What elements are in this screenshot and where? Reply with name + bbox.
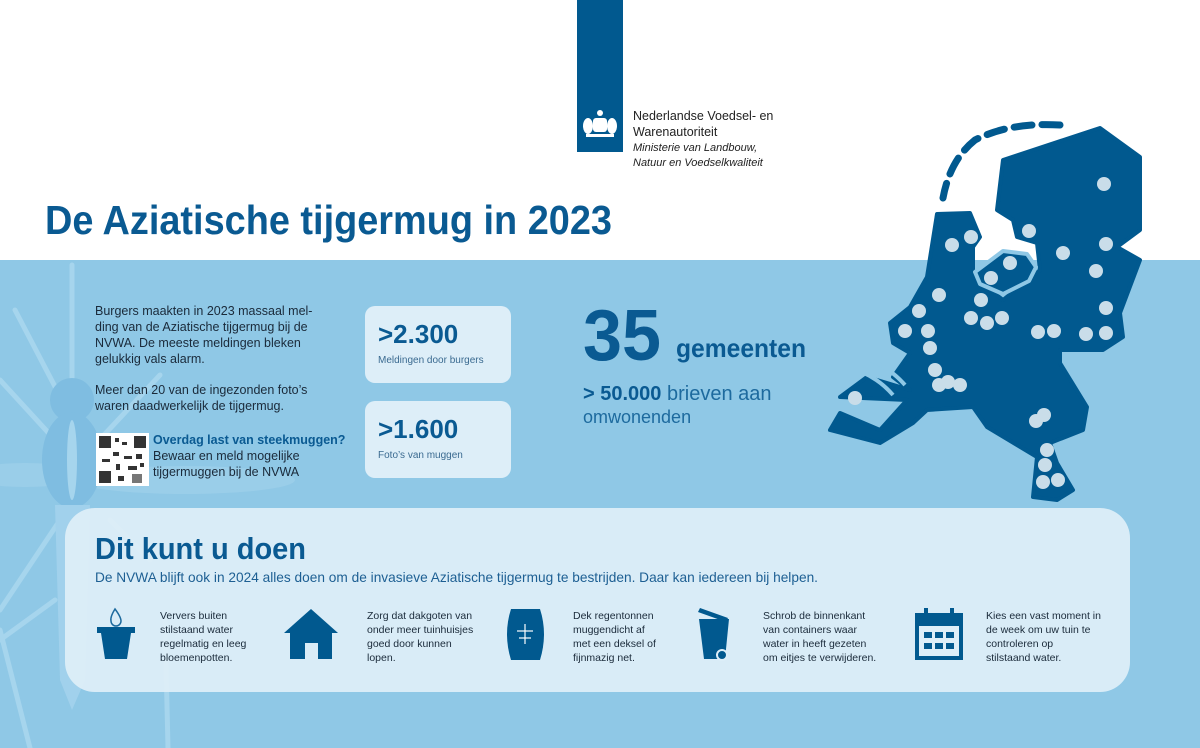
logo [577,0,773,169]
logo: Ministerie van Landbouw, [633,142,757,154]
QR code callout [96,433,345,486]
text: step 3 [573,610,656,664]
stat box: meldingen [365,306,511,383]
QR code callout: tijgermuggen bij de NVWA [153,465,300,479]
icon: flower pot [97,609,135,659]
text: step 4 [762,610,876,664]
text: step 2: Zorg dat dakgoten van [367,610,472,622]
text: step 5 [986,610,1101,664]
icon: calendar [915,608,963,660]
text: step 1: stilstaand water [160,624,233,636]
text: step 2: lopen. [367,652,396,664]
logo: Warenautoriteit [633,125,718,139]
panel: Dit kunt u doen [65,508,1130,692]
text block: intro: Meer dan 20 van de ingezonden foto’s [95,383,307,397]
stat box: meldingen: Meldingen door burgers [378,355,484,366]
icon: coat of arms [583,110,617,137]
text: step 2 [367,610,473,664]
text block: intro: ding van de Aziatische tijgermug bij de [95,320,308,334]
stat box: meldingen: >2.300 [378,319,458,349]
text: step 2: onder meer tuinhuisjes [367,624,473,636]
text: step 1: bloemenpotten. [160,652,232,664]
text block: intro [94,304,312,413]
mosquito illustration [0,265,295,748]
stat: 35 gemeenten: omwonenden [583,407,691,427]
text: step 3: Dek regentonnen [573,610,654,622]
text block: intro: waren daadwerkelijk de tijgermug. [94,399,284,413]
text: step 4: Schrob de binnenkant [763,610,865,622]
stat: 35 gemeenten: gemeenten [676,333,806,363]
text: step 3: muggendicht af [573,624,645,636]
text: step 4: water in heeft gezeten [762,638,866,650]
text: step 5: de week om uw tuin te [986,624,1091,636]
text: step 2: goed door kunnen [367,638,452,650]
text block: intro: gelukkig vals alarm. [95,352,205,366]
icon: wheelie bin [698,608,729,660]
text: step 1 [160,610,247,664]
map: Netherlands [830,125,1140,500]
stat box: foto's [365,401,511,478]
QR code callout: Bewaar en meld mogelijke [153,449,300,463]
QR code callout: Overdag last van steekmuggen? [153,433,345,447]
text: step 5: Kies een vast moment in [986,610,1101,622]
stat box: foto's: Foto’s van muggen [378,450,463,461]
text: step 1: Ververs buiten [160,610,227,622]
text: step 5: stilstaand water. [986,652,1061,664]
subtitle: De NVWA blijft ook in 2024 alles doen om de invasieve Aziatische tijgermug te bestrijden. Daar kan iedereen bij helpen. [95,569,818,585]
text block: intro: Burgers maakten in 2023 massaal mel- [95,304,312,318]
icon: rain barrel [507,609,544,660]
stat: 35 gemeenten [583,296,806,427]
logo: Nederlandse Voedsel- en [633,109,773,123]
text: step 1: regelmatig en leeg [160,638,247,650]
text: step 3: met een deksel of [573,638,656,650]
logo: Natuur en Voedselkwaliteit [633,157,764,169]
title: De Aziatische tijgermug in 2023 [45,197,612,243]
stat box: foto's: >1.600 [378,414,458,444]
icon: house [284,609,338,659]
stat: 35 gemeenten: > 50.000 brieven aan [583,383,772,405]
text: step 4: om eitjes te verwijderen. [763,652,876,664]
text block: intro: NVWA. De meeste meldingen bleken [95,336,301,350]
stat: 35 gemeenten: 35 [583,296,661,376]
heading: Dit kunt u doen [95,531,306,566]
text: step 5: controleren op [986,638,1053,650]
text: step 4: van containers waar [763,624,857,636]
text: step 3: fijnmazig net. [573,652,635,664]
